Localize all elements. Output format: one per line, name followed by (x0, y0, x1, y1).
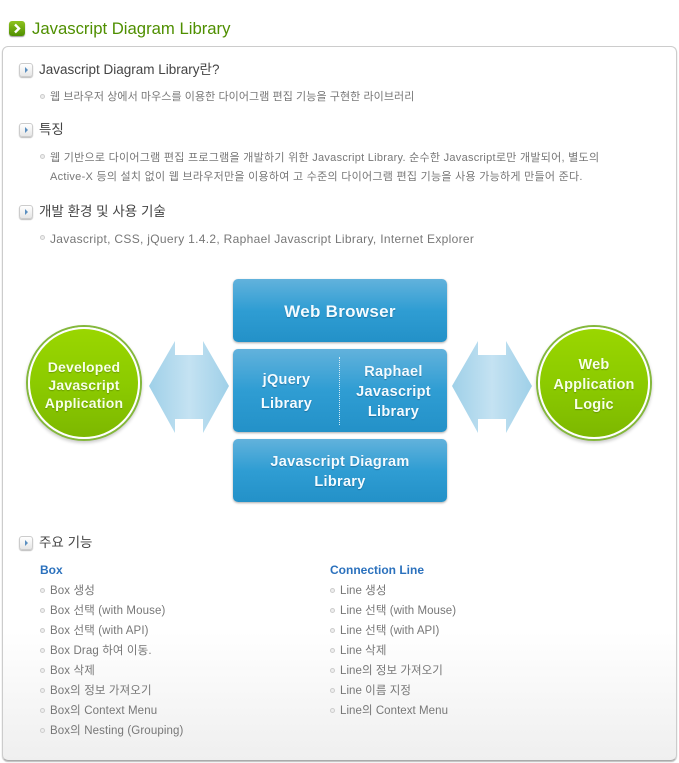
dots (330, 588, 335, 713)
list: Box의 정보 가져오기 (50, 685, 152, 697)
list: Line 삭제 (340, 645, 386, 657)
icon: green arrow (9, 21, 25, 36)
circle: developed application: Application (45, 395, 123, 411)
list: Box 삭제 (50, 665, 95, 677)
icon: bullet (19, 123, 33, 137)
box: web browser (233, 279, 447, 342)
circle: web application logic: Web (579, 357, 609, 373)
label: jQuery (261, 372, 312, 412)
circle: developed application: Developed (48, 359, 120, 375)
title (8, 19, 230, 38)
label: jQuery: jQuery (263, 372, 310, 388)
column heading: Box (40, 563, 63, 577)
text: Active-X 등의 설치 없이 웹 브라우저만을 이용하여 고 수준의 다이어그램 편집 기능을 사용 가능하게 만들어 준다. (50, 171, 583, 183)
list: Box의 Nesting (Grouping) (50, 725, 184, 737)
section: features (18, 122, 599, 183)
list: Line의 정보 가져오기 (340, 665, 443, 677)
list: Box 생성 (50, 585, 95, 597)
heading: 주요 기능 (39, 535, 92, 550)
column: line features (330, 563, 456, 717)
list (340, 584, 456, 717)
label: Raphael: Javascript (356, 384, 431, 400)
section: environment (18, 204, 474, 246)
label: Raphael: Library (368, 404, 419, 420)
bullet dot (40, 94, 45, 99)
box: libraries (233, 349, 447, 432)
label: Raphael (356, 364, 431, 420)
circle: web application logic (538, 327, 650, 439)
title text: Javascript Diagram Library (32, 19, 230, 38)
circle: web application logic: Logic (574, 397, 614, 413)
label: jQuery: Library (261, 396, 312, 412)
icon: bullet (19, 63, 33, 77)
column heading: Connection Line (330, 563, 424, 577)
circle: developed application (28, 327, 140, 439)
icon: bullet (19, 536, 33, 550)
text: 웹 브라우저 상에서 마우스를 이용한 다이어그램 편집 기능을 구현한 라이브러리 (50, 91, 414, 103)
box: web browser: Web Browser (284, 302, 396, 321)
bullet dot (40, 235, 45, 240)
diagram (24, 278, 654, 504)
box: diagram library (233, 439, 447, 502)
list: Line 생성 (340, 585, 386, 597)
box: diagram library: Library (314, 474, 366, 490)
text: 웹 기반으로 다이어그램 편집 프로그램을 개발하기 위한 Javascript Library. 순수한 Javascript로만 개발되어, 별도의 (50, 152, 599, 164)
list: Box 선택 (with API) (50, 625, 149, 637)
list: Box 선택 (with Mouse) (50, 605, 165, 617)
circle: web application logic: Application (553, 377, 635, 393)
heading: 특징 (39, 122, 64, 137)
label: Raphael: Raphael (364, 364, 423, 380)
arrow: right double arrow (452, 341, 532, 433)
heading: 개발 환경 및 사용 기술 (39, 204, 166, 219)
circle: developed application: Javascript (48, 377, 120, 393)
list: Box의 Context Menu (50, 705, 157, 717)
list: Line의 Context Menu (340, 705, 448, 717)
box: diagram library: Javascript Diagram (270, 454, 410, 470)
text: Javascript, CSS, jQuery 1.4.2, Raphael Javascript Library, Internet Explorer (50, 232, 474, 246)
list: Line 이름 지정 (340, 685, 411, 697)
list (50, 584, 184, 737)
section: main features (18, 535, 456, 737)
divider (339, 357, 340, 425)
bullet dot (40, 154, 45, 159)
arrow: left double arrow (149, 341, 229, 433)
column: box features (40, 563, 184, 737)
section: what is it (18, 62, 414, 103)
icon: bullet (19, 205, 33, 219)
list: Line 선택 (with Mouse) (340, 605, 456, 617)
list: Line 선택 (with API) (340, 625, 439, 637)
dots (40, 588, 45, 733)
heading: Javascript Diagram Library란? (39, 62, 219, 77)
text (50, 152, 599, 183)
list: Box Drag 하여 이동. (50, 645, 152, 657)
